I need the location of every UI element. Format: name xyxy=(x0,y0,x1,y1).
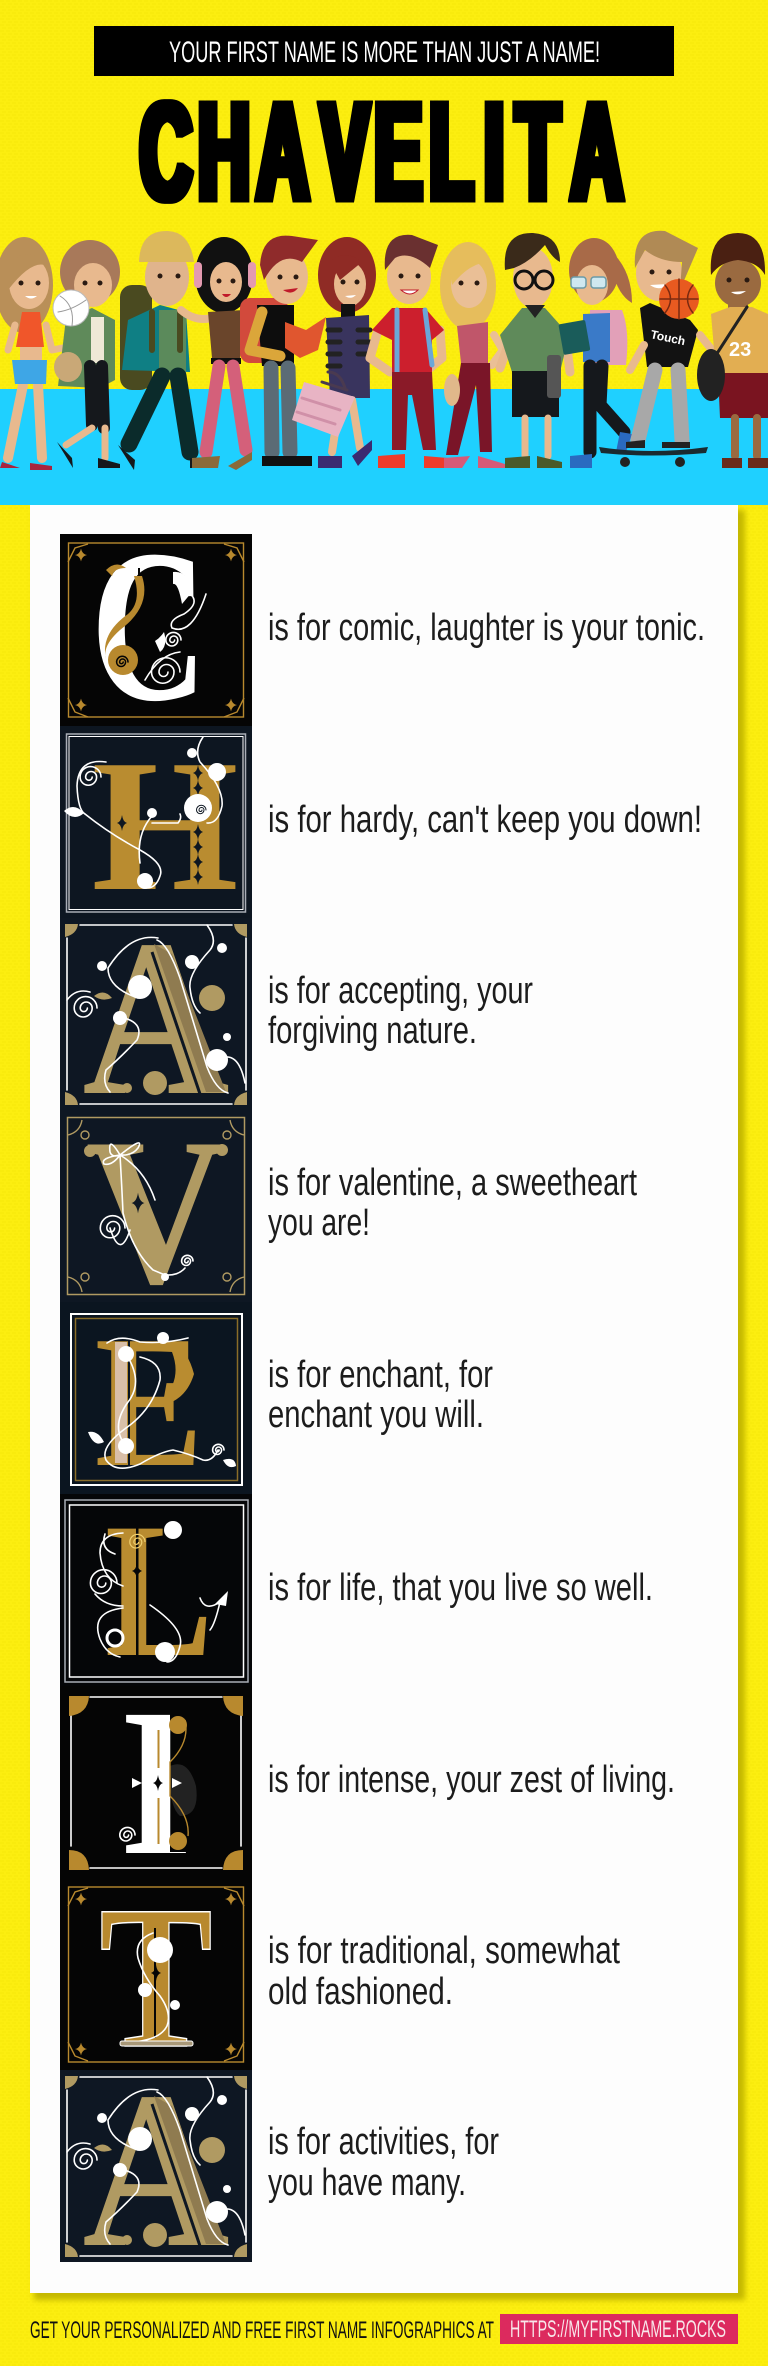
person 3: boy with cap and backpack xyxy=(118,231,208,470)
person 5: boy with book xyxy=(240,236,326,466)
text: E meaning: enchant you will. xyxy=(268,1394,484,1436)
person 6: girl with pink bag xyxy=(292,237,376,468)
text: T meaning: is for traditional, somewhat xyxy=(268,1930,620,1972)
text: second A meaning: is for activities, for xyxy=(268,2121,499,2163)
text: A meaning: forgiving nature. xyxy=(268,1010,477,1052)
illustration: group of students xyxy=(0,231,768,470)
text: E meaning: is for enchant, for xyxy=(268,1354,493,1396)
tile: letter T xyxy=(60,1863,252,2091)
text: T meaning xyxy=(268,1930,620,2013)
tile: letter E: E xyxy=(95,1298,203,1507)
top banner xyxy=(94,26,674,76)
tile: letter C: C xyxy=(91,506,207,747)
tile: letter I xyxy=(60,1665,252,1899)
tile: letter A: A xyxy=(82,894,230,1142)
text: A meaning: is for accepting, your xyxy=(268,970,533,1012)
text: second A meaning: you have many. xyxy=(268,2162,466,2204)
text: L meaning: is for life, that you live so well. xyxy=(268,1567,653,1609)
tile: letter V: V xyxy=(85,1095,227,1328)
text: E meaning xyxy=(268,1354,493,1436)
panel: white name meaning panel xyxy=(30,505,738,2294)
text: second A meaning xyxy=(268,2121,499,2204)
tile: letter E xyxy=(60,1298,252,1507)
person 12: boy in yellow tank top: 23 xyxy=(729,339,751,361)
tile: letter T: T xyxy=(99,1863,213,2091)
text: V meaning: you are! xyxy=(268,1202,370,1244)
person 8: blonde girl xyxy=(440,242,505,468)
text: V meaning xyxy=(268,1162,637,1244)
text: V meaning: is for valentine, a sweetheart xyxy=(268,1162,637,1204)
tile: letter H: H xyxy=(91,721,239,930)
person 4: girl with headphones xyxy=(181,237,256,470)
text: T meaning: old fashioned. xyxy=(268,1971,453,2013)
person 7: boy in red shirt xyxy=(370,235,448,468)
tile: letter A second: A xyxy=(82,2046,230,2294)
person 1: girl in orange top xyxy=(0,237,78,470)
blue floor band xyxy=(0,389,768,505)
tile: letter I: I xyxy=(120,1665,192,1899)
tile: letter L xyxy=(60,1483,252,1697)
tile: letter L: L xyxy=(105,1483,213,1697)
text: A meaning xyxy=(268,970,533,1052)
title: name: CHAVELITA xyxy=(140,75,623,229)
person 9: boy with glasses xyxy=(500,233,570,468)
person 2: girl with volleyball xyxy=(53,240,120,468)
person 12: boy in yellow tank top xyxy=(697,233,768,468)
person 11: skateboarder with basketball xyxy=(599,231,712,467)
person 10: girl with ponytail xyxy=(558,238,632,468)
panel shadow xyxy=(34,510,745,2300)
tile: letter C xyxy=(60,506,252,747)
person 11: skateboarder with basketball: Touch xyxy=(649,327,687,348)
